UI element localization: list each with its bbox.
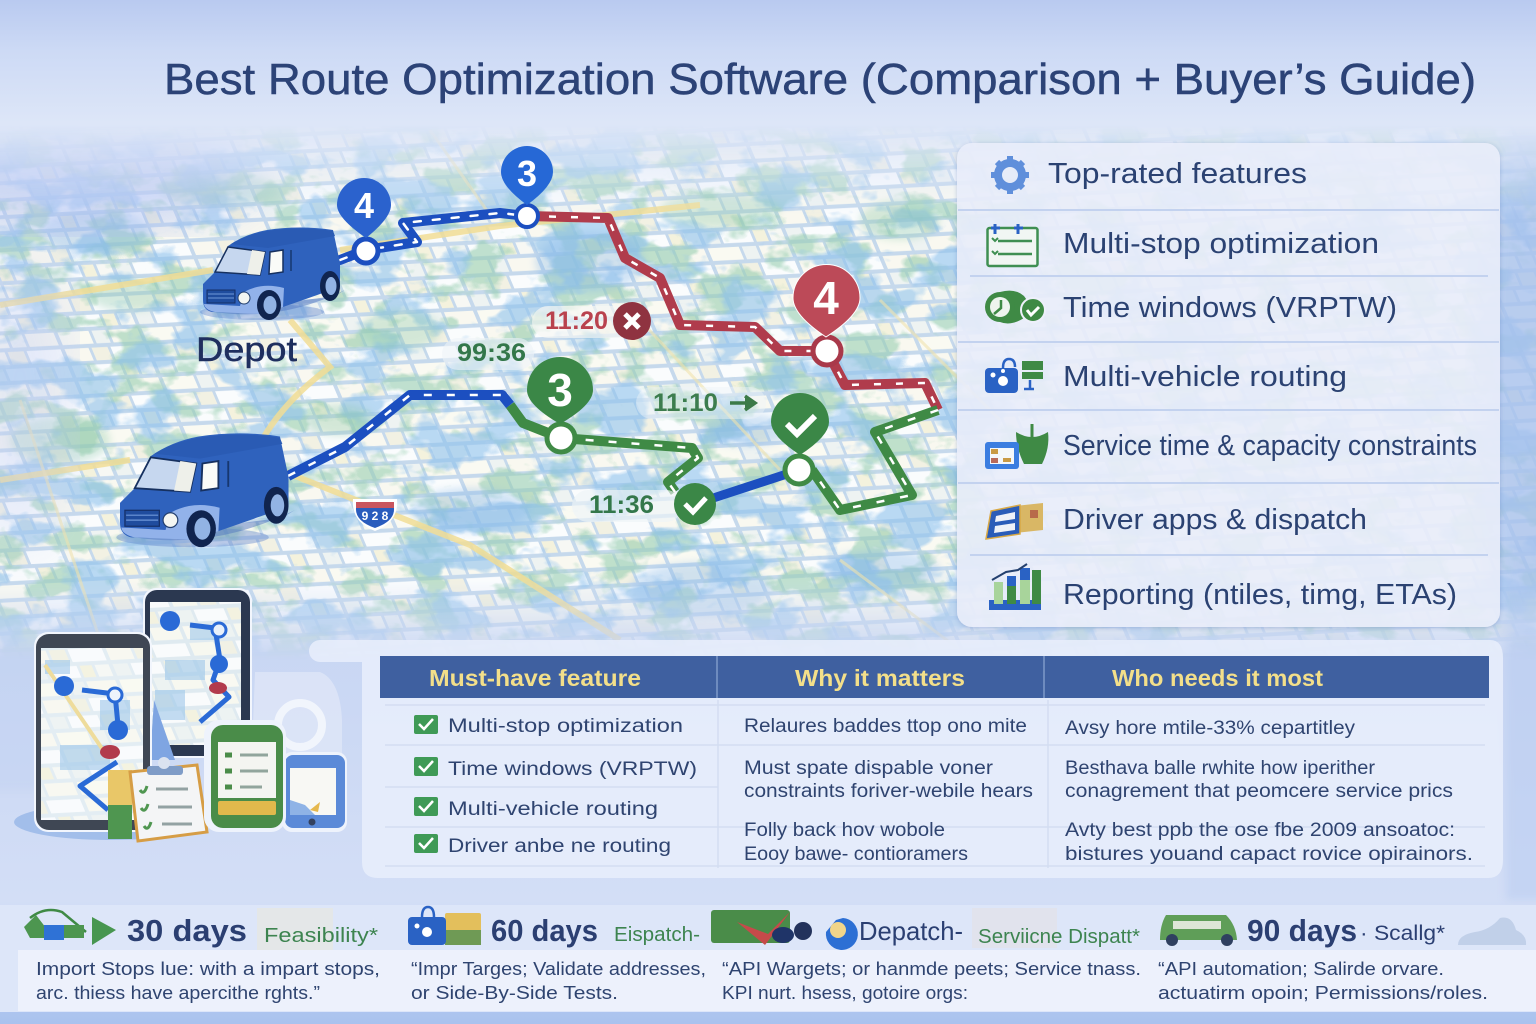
time pill: 99:36	[442, 338, 534, 370]
time pill: 11:36 done	[572, 483, 716, 525]
right phone	[143, 588, 252, 760]
milestone: 60 days: “Impr Targes; Validate addresses,	[411, 958, 706, 979]
route: blue segment between checks	[695, 470, 799, 504]
column: why it matters: Relaures baddes ttop ono mite	[744, 716, 1027, 737]
time pill: 11:20 late	[532, 302, 651, 340]
panel: top-rated features	[957, 143, 1500, 627]
milestone: 60 days: 60 days	[491, 913, 598, 948]
gear icon	[991, 156, 1029, 194]
time pill: 99:36: 99:36	[457, 339, 526, 367]
lower background wash	[0, 640, 1536, 900]
row text: Service time & capacity constraints	[1063, 430, 1477, 462]
milestone: 90 days: 90 days	[1247, 913, 1357, 948]
table header row: Who needs it most	[1112, 665, 1323, 691]
depot label: Depot	[196, 331, 298, 369]
route: blue segment from second van	[288, 395, 510, 476]
milestone: 90 days: actuatirm opoin; Permissions/roles.	[1158, 982, 1488, 1003]
column: who needs it most: conagrement that peomcere service prics	[1065, 781, 1453, 802]
left phone	[34, 632, 152, 832]
clipboard	[130, 757, 207, 841]
column: must-have features: Time windows (VRPTW)	[448, 759, 697, 780]
icon: checklist calendar	[988, 224, 1038, 266]
icon: green bus	[1160, 915, 1237, 946]
time pill: 11:10 on time	[636, 387, 766, 419]
phones and dispatch devices	[14, 588, 347, 841]
milestone: 30 days: Feasibility*	[264, 925, 378, 947]
route: red segment	[527, 216, 938, 410]
milestone: 30 days: 30 days	[127, 913, 247, 948]
row text: Driver apps & dispatch	[1063, 504, 1367, 536]
highway shield: 9 2 8	[362, 509, 389, 523]
van: depot	[200, 228, 355, 320]
title: Best Route Optimization Software (Comparison + Buyer’s Guide)	[164, 55, 1476, 104]
van: second route	[116, 433, 307, 547]
stop node: red 4: 4	[813, 272, 839, 324]
stop node: blue 3	[501, 146, 553, 227]
icon: dispatch badge	[826, 918, 858, 950]
column: who needs it most: bistures youand capact rovice opirainors.	[1065, 844, 1473, 865]
city map background	[0, 134, 1536, 646]
column: who needs it most: Besthava balle rwhite how iperither	[1065, 758, 1376, 779]
row text: Time windows (VRPTW)	[1063, 292, 1397, 324]
stop node: blue 4: 4	[354, 185, 374, 226]
milestone: 30 days: Import Stops lue: with a impart stops,	[36, 958, 380, 979]
milestone: dispatch: Depatch-	[859, 916, 963, 946]
highway shield	[353, 499, 397, 531]
icon: plug arrow	[24, 910, 116, 945]
icon: multi-vehicle	[985, 359, 1043, 393]
time pill: 11:36 done: 11:36	[589, 491, 654, 519]
time pill: 11:20 late: 11:20	[545, 307, 608, 335]
milestone: 60 days: Eispatch-	[614, 924, 700, 946]
stop node: blue 4	[337, 178, 391, 263]
icon: driver apps	[986, 503, 1043, 539]
milestone: 90 days	[1158, 913, 1488, 1003]
icon: clocks	[985, 291, 1045, 324]
milestone: 60 days: or Side-By-Side Tests.	[411, 982, 618, 1003]
row text: Reporting (ntiles, timg, ETAs)	[1063, 579, 1457, 611]
milestone: 60 days	[411, 913, 706, 1003]
panel: must-have feature table	[309, 640, 1503, 878]
icon: cloud	[1458, 918, 1526, 945]
column: why it matters: constraints foriver-webile hears	[744, 781, 1033, 802]
stop node: red 4	[793, 264, 860, 365]
column: must-have features: Multi-stop optimization	[448, 716, 683, 737]
icon: reporting chart	[989, 564, 1041, 610]
stop node: green 3	[527, 357, 593, 452]
row text: Multi-vehicle routing	[1063, 361, 1347, 393]
column: must-have features: Multi-vehicle routing	[448, 799, 658, 820]
milestone: dispatch	[722, 908, 1141, 1003]
icon: service capacity	[985, 424, 1048, 469]
column: must-have features: Driver anbe ne routing	[448, 836, 671, 857]
stop node: green 3: 3	[547, 364, 573, 416]
milestone: dispatch: KPI nurt. hsess, gotoire orgs:	[722, 982, 968, 1003]
tablet	[282, 752, 347, 832]
route: green segment right loop	[812, 410, 938, 510]
milestone: 30 days: arc. thiess have apercithe rghts.”	[36, 982, 320, 1003]
route: green segment middle	[510, 405, 698, 492]
cargo stack	[108, 770, 132, 839]
table header row: Must-have feature	[429, 665, 641, 691]
column: who needs it most: Avsy hore mtile-33% cepartitley	[1065, 718, 1356, 739]
column: why it matters: Must spate dispable voner	[744, 758, 994, 779]
time pill: 11:10 on time: 11:10	[653, 389, 718, 417]
milestone: 30 days	[36, 908, 380, 1003]
column: must-have features	[414, 715, 697, 857]
stop node: green check	[771, 393, 829, 484]
column: why it matters	[744, 716, 1033, 865]
milestone: dispatch: Serviicne Dispatt*	[978, 926, 1140, 948]
column: why it matters: Folly back hov wobole	[744, 820, 945, 841]
milestone: dispatch: “API Wargets; or hanmde peets; Service tnass.	[722, 958, 1141, 979]
panel heading: Top-rated features	[1048, 158, 1307, 190]
stop node: blue 3: 3	[517, 153, 537, 194]
row text: Multi-stop optimization	[1063, 228, 1379, 260]
route: blue segment from depot van	[340, 213, 527, 260]
table header row	[380, 656, 1489, 698]
milestone: 90 days: · Scallg*	[1360, 922, 1445, 945]
green phone	[204, 720, 286, 832]
band: 30/60/90 day plan	[0, 905, 1536, 1012]
column: who needs it most: Avty best ppb the ose fbe 2009 ansoatoc:	[1065, 820, 1455, 841]
icon: dispatch box	[408, 907, 481, 945]
column: who needs it most	[1065, 718, 1473, 865]
icon: green tag with mask	[711, 910, 812, 945]
milestone: 90 days: “API automation; Salirde orvare.	[1158, 958, 1444, 979]
table header row: Why it matters	[795, 665, 965, 691]
column: why it matters: Eooy bawe- contioramers	[744, 844, 968, 865]
